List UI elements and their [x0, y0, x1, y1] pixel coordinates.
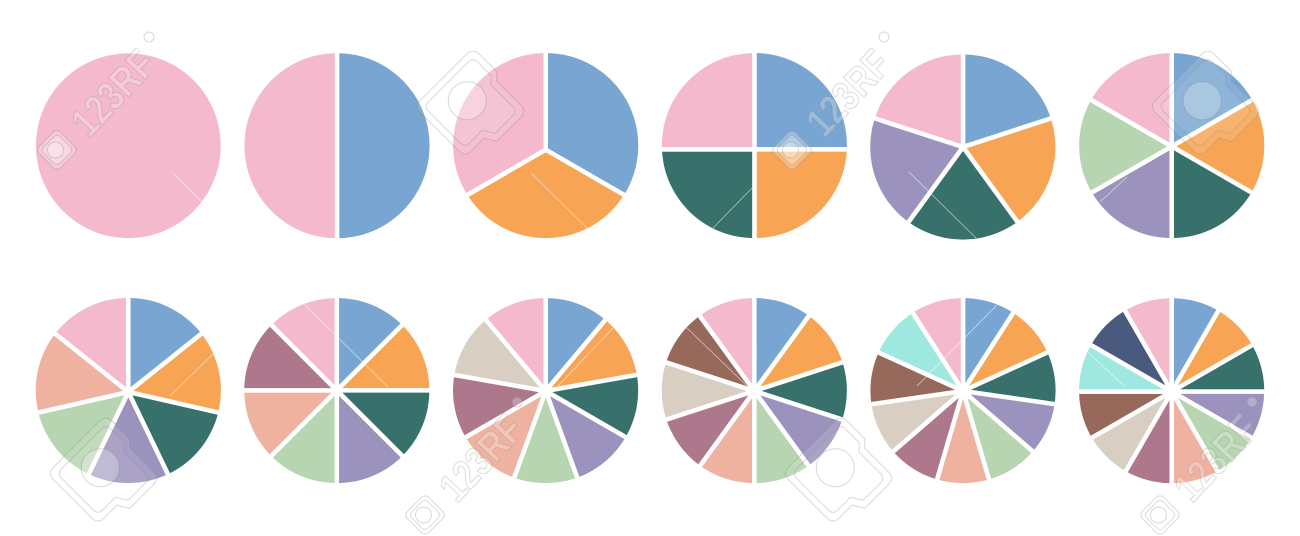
watermark logo top left [36, 32, 164, 171]
slice blue [339, 298, 402, 385]
slice teal [132, 390, 219, 474]
slice pink [874, 54, 966, 148]
slice orange [468, 148, 625, 238]
slice green [38, 396, 128, 475]
slice orange [966, 116, 1056, 222]
slice blue [337, 53, 430, 238]
slice teal [546, 368, 691, 475]
slice brown [628, 276, 778, 391]
pie chart: 11 segments [816, 241, 1113, 536]
slice teal [1172, 325, 1300, 449]
watermark camera icon 1 [414, 48, 532, 165]
watermark logo bottom right [1139, 397, 1267, 536]
watermark logo top right: 123RF [797, 41, 899, 145]
slice green [691, 391, 832, 536]
slice orange [546, 290, 696, 446]
slice beige [415, 284, 560, 391]
slice aqua [1039, 325, 1172, 392]
slice salmon [421, 362, 546, 515]
slice brown [822, 320, 963, 410]
watermark logo top right [771, 32, 899, 171]
slice green [271, 396, 340, 484]
slice teal [754, 350, 904, 465]
slice pink [244, 53, 340, 238]
slice mauve [614, 345, 754, 498]
slice purple [337, 392, 404, 484]
slice salmon [244, 391, 334, 458]
slice salmon [894, 391, 1000, 536]
slice orange [130, 332, 221, 412]
slice mauve [389, 317, 546, 457]
slice salmon [677, 391, 754, 523]
watermark camera icon 3 [47, 415, 165, 532]
pie chart: 12 segments [1024, 244, 1300, 536]
slice teal [342, 388, 430, 456]
slice beige [604, 317, 754, 432]
slice blue [754, 259, 832, 391]
slice salmon [36, 334, 124, 415]
slice pink [243, 231, 403, 390]
slice navy [1057, 268, 1205, 392]
slice teal [662, 152, 757, 238]
slice green [1079, 101, 1170, 194]
pie chart: 9 segments [389, 235, 696, 536]
watermark camera icon 2 [1149, 48, 1267, 165]
slice blue [128, 298, 202, 387]
slice purple [953, 391, 1094, 481]
slice pink [662, 53, 757, 152]
slice teal [963, 336, 1113, 456]
slice purple [1172, 392, 1300, 458]
slice pink [891, 241, 1023, 391]
watermark logo bottom middle [404, 397, 532, 536]
slice orange [754, 147, 847, 238]
slice green [916, 391, 1063, 532]
slice orange [1174, 98, 1264, 192]
pie chart: 2 segments [244, 53, 430, 238]
pie chart: 5 segments [870, 54, 1056, 240]
watermark logo top left: 123RF [62, 41, 164, 145]
slice purple [1092, 150, 1174, 238]
watermark camera icon 4 [782, 415, 900, 532]
pie chart: 10 segments [604, 238, 904, 536]
slice blue [1172, 259, 1238, 392]
slice purple [90, 396, 170, 484]
slice teal [1172, 146, 1252, 238]
pie chart: 7 segments [36, 298, 221, 484]
slice mauve [1106, 392, 1172, 524]
pie chart: 4 segments [662, 53, 847, 238]
slice blue [963, 259, 1035, 391]
watermark logo bottom right: 123RF [1165, 406, 1267, 510]
slice pink [1106, 244, 1229, 392]
pie chart: 1 segment [36, 53, 221, 238]
slice blue [756, 53, 847, 149]
slice blue [546, 259, 631, 391]
slice pink [54, 298, 131, 391]
slice purple [870, 120, 963, 224]
slice aqua [843, 271, 993, 391]
slice brown [1024, 334, 1172, 458]
slice blue [963, 54, 1051, 144]
slice beige [816, 337, 963, 478]
slice blue [548, 53, 638, 195]
slice orange [339, 324, 430, 390]
pie chart: 6 segments [1079, 53, 1264, 238]
slice salmon [1114, 392, 1238, 536]
slice pink [453, 53, 548, 197]
slice orange [1172, 277, 1295, 425]
pie chart: 8 segments [244, 298, 430, 484]
pie chart: 3 segments [453, 53, 638, 238]
slice mauve [857, 371, 963, 518]
slice blue [1174, 53, 1252, 142]
slice orange [754, 284, 895, 437]
slice beige [1048, 359, 1172, 506]
slice orange [963, 280, 1095, 430]
slice pink [677, 238, 817, 391]
slice purple [730, 391, 880, 506]
slice mauve [204, 297, 337, 390]
slice green [1139, 392, 1286, 515]
slice green [466, 391, 591, 536]
watermark logo bottom middle: 123RF [430, 406, 532, 510]
slice purple [503, 391, 660, 531]
slice teal [908, 148, 1019, 240]
slice pink [461, 235, 611, 391]
slice pink [1090, 53, 1174, 146]
